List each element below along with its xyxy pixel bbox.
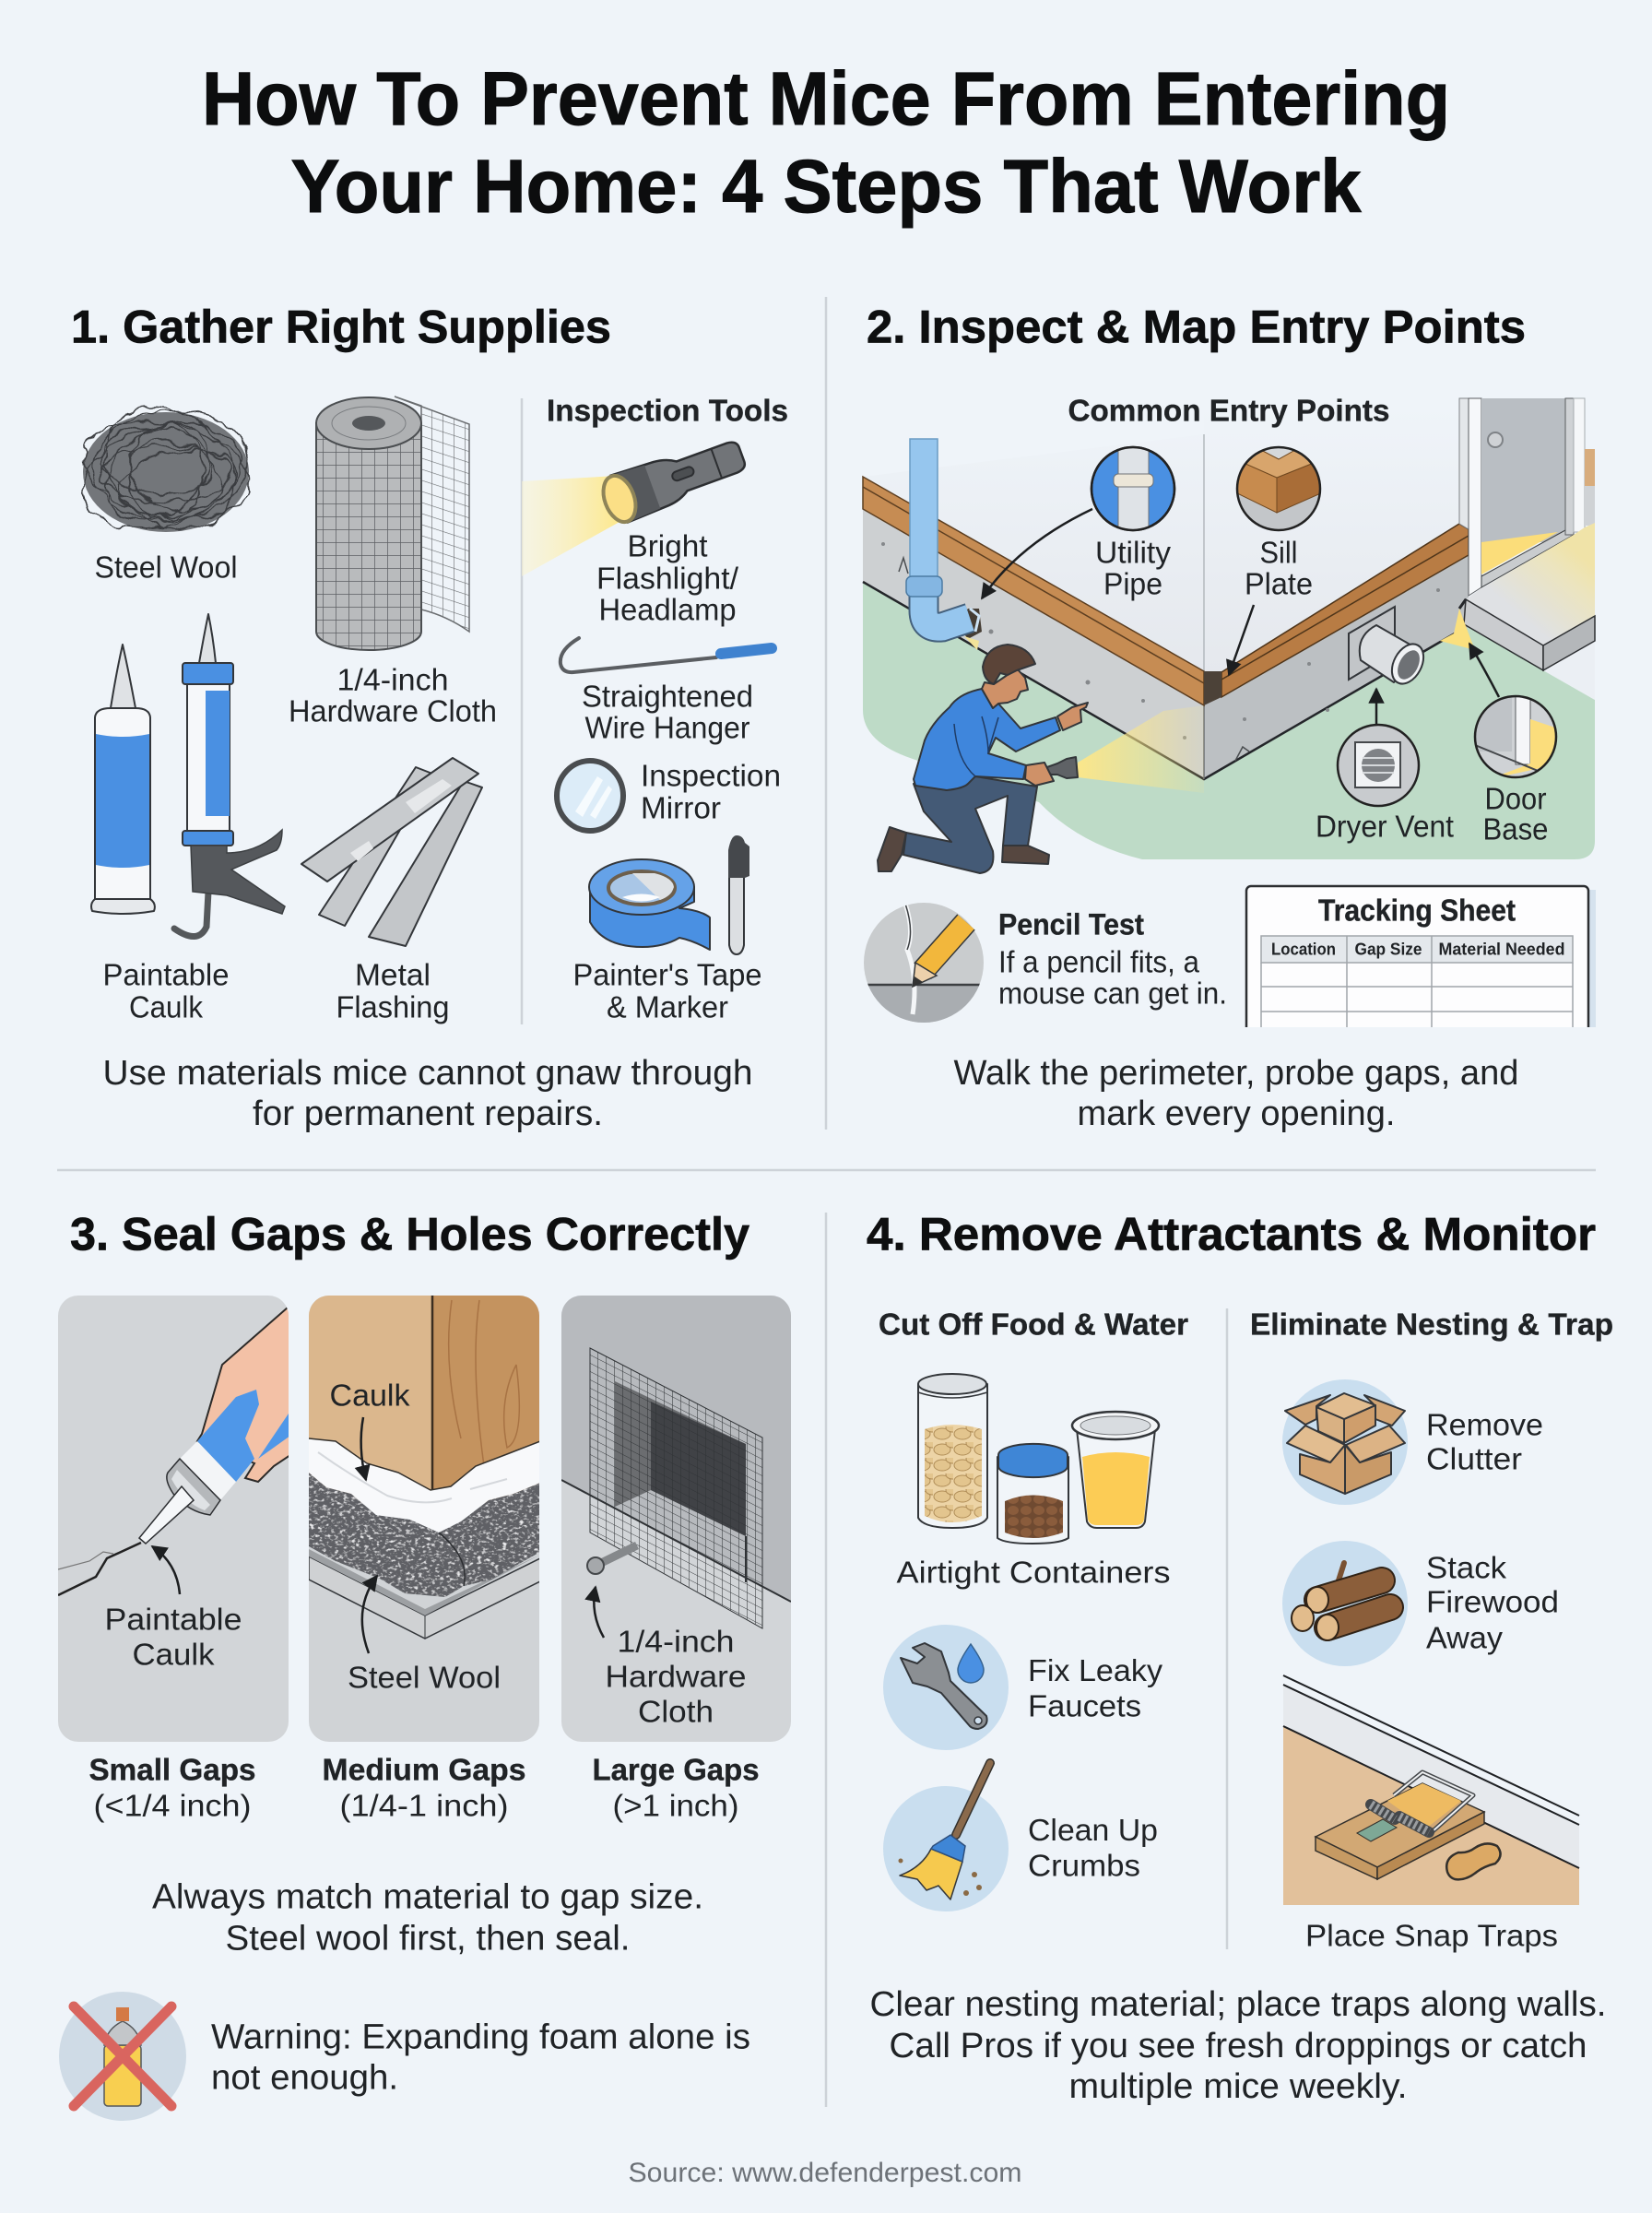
item: steel wool (71, 381, 259, 585)
icon: no expanding foam (59, 1992, 186, 2121)
caption: step 4 (870, 1985, 1606, 2106)
item: flashlight: Flashlight/ (596, 561, 739, 596)
callout: dryer vent: Dryer Vent (1316, 810, 1454, 843)
item: metal flashing: Flashing (336, 990, 450, 1024)
medium gaps card (309, 1296, 540, 1742)
caption: step 3: Steel wool first, then seal. (225, 1920, 631, 1959)
gap size labels: Small Gaps (88, 1752, 256, 1787)
item: stack firewood: Firewood (1426, 1584, 1559, 1619)
caption: step 4: multiple mice weekly. (1069, 2067, 1407, 2106)
item: wire hanger (560, 638, 772, 745)
panel: step 2 inspect and map (857, 301, 1596, 1133)
title: How To Prevent Mice From Entering (202, 57, 1450, 141)
item: inspection mirror (557, 758, 781, 831)
tracking sheet: Material Needed (1438, 941, 1565, 959)
subheading: inspection tools: Inspection Tools (547, 393, 788, 428)
pencil test: mouse can get in. (998, 976, 1227, 1011)
gap size labels: (>1 inch) (612, 1789, 739, 1822)
caption: step 3: Always match material to gap size. (152, 1877, 703, 1916)
medium gaps card: Caulk (330, 1378, 410, 1413)
item: paintable caulk tube and gun: Caulk (129, 990, 203, 1024)
callout: sill plate (1235, 443, 1323, 601)
item: wire hanger: Wire Hanger (584, 710, 750, 745)
item: wire hanger: Straightened (582, 679, 753, 714)
gap size labels: (<1/4 inch) (94, 1789, 251, 1822)
item: fix leaky faucets (883, 1625, 1163, 1750)
callout: door base: Door (1484, 782, 1547, 815)
item: clean up crumbs: Clean Up (1028, 1813, 1158, 1847)
callout: door base: Base (1482, 811, 1549, 846)
caption: step 4: Clear nesting material; place traps along walls. (870, 1985, 1606, 2024)
item: inspection mirror: Inspection (641, 758, 781, 793)
item: flashlight: Headlamp (599, 592, 736, 627)
item: paintable caulk tube and gun: Paintable (103, 957, 229, 992)
item: inspection mirror: Mirror (641, 791, 721, 824)
item: stack firewood (1282, 1541, 1559, 1666)
subheading: cut off food and water: Cut Off Food & Water (879, 1308, 1188, 1341)
item: painter's tape and marker: Painter's Tape (573, 957, 761, 992)
caption: step 2 (953, 1054, 1519, 1133)
heading: step 2: 2. Inspect & Map Entry Points (867, 301, 1526, 352)
item: remove clutter: Remove (1426, 1407, 1543, 1442)
callouts: entry point arrows (982, 509, 1499, 725)
small gaps card (58, 1296, 290, 1742)
warning text: Warning: Expanding foam alone is (211, 2018, 750, 2056)
item: stack firewood: Away (1426, 1621, 1504, 1654)
pencil test (857, 903, 1227, 1031)
heading: step 1: 1. Gather Right Supplies (71, 301, 611, 352)
panel: step 1 gather supplies (71, 301, 788, 1133)
callout: door base (1475, 696, 1558, 846)
item: stack firewood: Stack (1426, 1551, 1507, 1584)
pencil test: If a pencil fits, a (998, 944, 1200, 979)
item: fix leaky faucets: Fix Leaky (1028, 1653, 1163, 1687)
subheading: common entry points: Common Entry Points (1068, 393, 1390, 428)
item: remove clutter (1282, 1379, 1543, 1505)
item: airtight containers: Airtight Containers (896, 1555, 1171, 1590)
small gaps card: Caulk (133, 1638, 215, 1671)
item: flashlight: Bright (627, 529, 708, 562)
callout: utility pipe: Utility (1095, 535, 1171, 570)
item: snap trap scene: Place Snap Traps (1305, 1918, 1558, 1953)
small gaps card: Paintable (105, 1603, 242, 1636)
callout: sill plate: Plate (1245, 566, 1313, 601)
caption: step 1: Use materials mice cannot gnaw through (103, 1054, 753, 1093)
caption: step 2: Walk the perimeter, probe gaps, and (953, 1054, 1519, 1093)
tracking sheet: Tracking Sheet (1318, 893, 1516, 928)
item: remove clutter: Clutter (1426, 1442, 1522, 1475)
tracking sheet (1245, 885, 1596, 1027)
item: flashlight (522, 431, 750, 627)
subheading: eliminate nesting and trap: Eliminate Nesting & Trap (1250, 1308, 1613, 1341)
item: clean up crumbs (883, 1763, 1158, 1911)
item: airtight containers (896, 1374, 1171, 1590)
item: clean up crumbs: Crumbs (1028, 1848, 1140, 1883)
item: fix leaky faucets: Faucets (1028, 1689, 1141, 1722)
large gaps card: Hardware (605, 1660, 747, 1693)
warning text (211, 2018, 750, 2097)
item: snap trap scene (1283, 1675, 1579, 1953)
gap size labels: (1/4-1 inch) (339, 1789, 509, 1822)
callout: dryer vent (1316, 725, 1454, 843)
heading: step 3: 3. Seal Gaps & Holes Correctly (70, 1208, 749, 1260)
item: metal flashing: Metal (355, 957, 431, 992)
source line: Source: www.defenderpest.com (629, 2158, 1021, 2188)
house illustration (863, 398, 1595, 859)
person with flashlight (878, 645, 1204, 873)
caption: step 1 (103, 1054, 753, 1133)
title: Your Home: 4 Steps That Work (291, 145, 1362, 229)
large gaps card: 1/4-inch (618, 1625, 734, 1658)
gap size labels: Large Gaps (592, 1752, 760, 1787)
heading: step 4: 4. Remove Attractants & Monitor (867, 1208, 1596, 1260)
warning text: not enough. (211, 2058, 398, 2097)
callout: utility pipe: Pipe (1103, 566, 1162, 601)
dryer vent (1349, 607, 1430, 689)
caption: step 3 (152, 1877, 703, 1959)
item: hardware cloth roll: 1/4-inch (337, 662, 448, 697)
gap size labels (88, 1752, 760, 1822)
gap size labels: Medium Gaps (323, 1752, 525, 1787)
caption: step 1: for permanent repairs. (253, 1095, 603, 1133)
callout: utility pipe (1092, 443, 1174, 601)
item: painter's tape and marker: & Marker (607, 990, 728, 1024)
caption: step 2: mark every opening. (1077, 1095, 1396, 1133)
item: hardware cloth roll (289, 396, 497, 728)
panel: step 3 seal gaps (58, 1208, 791, 2121)
item: metal flashing (301, 758, 482, 1024)
utility pipe (906, 439, 982, 650)
large gaps card: Cloth (638, 1695, 714, 1728)
pencil test: Pencil Test (998, 907, 1144, 941)
title (202, 57, 1450, 229)
item: painter's tape and marker (573, 835, 761, 1024)
panel: step 4 remove attractants (867, 1208, 1613, 2106)
callout: sill plate: Sill (1259, 535, 1298, 570)
tracking sheet: Location (1271, 941, 1336, 959)
item: paintable caulk tube and gun (91, 614, 285, 1024)
item: steel wool: Steel Wool (94, 550, 238, 585)
large gaps card (561, 1296, 791, 1742)
medium gaps card: Steel Wool (348, 1660, 501, 1695)
tracking sheet: Gap Size (1355, 941, 1422, 959)
item: hardware cloth roll: Hardware Cloth (289, 693, 497, 728)
caption: step 4: Call Pros if you see fresh droppings or catch (889, 2027, 1587, 2065)
